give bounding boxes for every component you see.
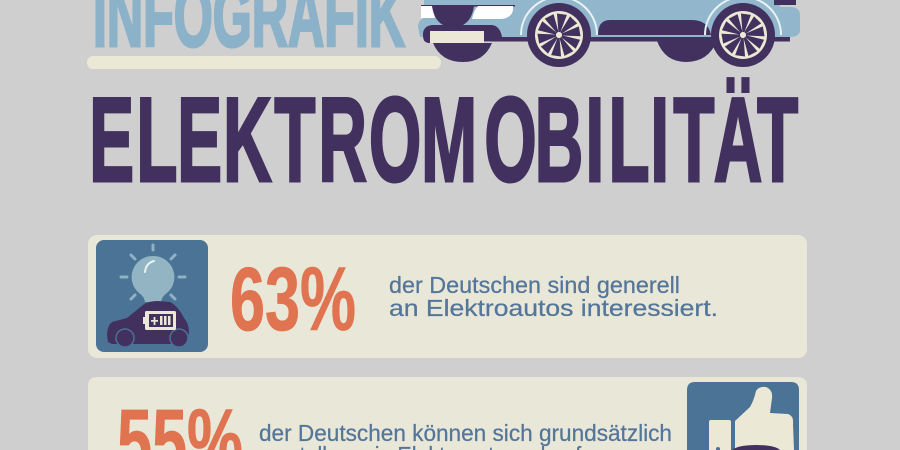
- headlights: [421, 6, 435, 18]
- small car: [107, 301, 189, 344]
- statistic: 63%: 63%: [230, 250, 356, 350]
- icon: light bulb and electric car: [96, 240, 208, 352]
- icon: car illustration: [418, 0, 800, 67]
- bulb rays: [121, 245, 185, 299]
- text block: der Deutschen können sich grundsätzlich: [259, 420, 672, 446]
- wheel arches: [521, 0, 781, 35]
- front wheel: [527, 3, 591, 67]
- car body: [418, 0, 800, 37]
- text block: der Deutschen sind generell: [389, 272, 680, 298]
- heading underline bar: [87, 56, 441, 69]
- front spoiler: [433, 43, 492, 62]
- panel: 55 percent: [88, 377, 807, 450]
- front grille: [432, 6, 474, 25]
- bulb: [132, 256, 174, 302]
- side sill: [598, 20, 711, 35]
- icon: thumbs up: [687, 382, 799, 450]
- text block: [389, 272, 718, 321]
- title: Elektromobilität: ELEKTROMOBILITÄT: [89, 72, 798, 207]
- text block: an Elektroautos interessiert.: [389, 295, 718, 321]
- underbody line: [490, 37, 790, 42]
- rear spoiler: [657, 41, 717, 62]
- rear top block: [774, 0, 796, 5]
- bumper plate: [430, 31, 484, 43]
- rear wheel: [711, 3, 775, 67]
- panel: 63 percent: [88, 235, 807, 358]
- front bumper: [423, 25, 502, 43]
- battery: [143, 311, 176, 330]
